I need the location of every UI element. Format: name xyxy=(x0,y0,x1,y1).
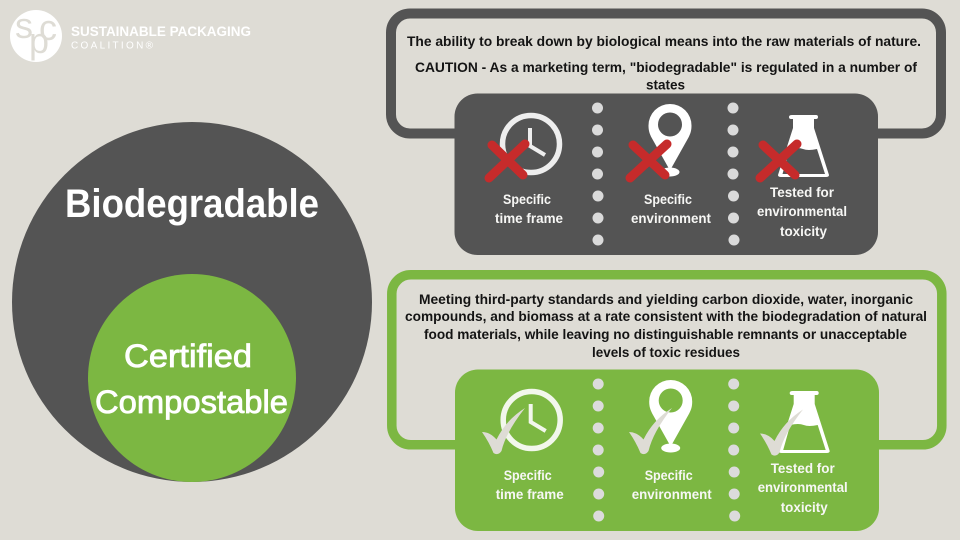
heading: biodegradable: Biodegradable xyxy=(65,182,319,226)
label: tested for environmental toxicity xyxy=(758,460,848,515)
label: specific environment: environment xyxy=(632,486,712,502)
label: tested for environmental toxicity: environmental xyxy=(758,479,848,495)
label: tested for environmental toxicity: environmental xyxy=(757,203,847,219)
label: specific environment: Specific xyxy=(644,191,692,207)
heading: certified compostable: Compostable xyxy=(95,384,288,420)
outline frame xyxy=(392,275,942,445)
icon: red cross on flask xyxy=(760,144,797,178)
definition text: compounds, and biomass at a rate consistent with the biodegradation of natural xyxy=(405,309,927,325)
logo mark xyxy=(10,5,62,62)
label: specific environment xyxy=(631,191,711,226)
definition text: CAUTION - As a marketing term, "biodegradable" is regulated in a number of xyxy=(415,60,917,76)
icon: location pin xyxy=(649,380,692,452)
icon: red cross on clock xyxy=(489,144,525,178)
definition text: levels of toxic residues xyxy=(592,345,740,361)
heading: certified compostable xyxy=(95,338,288,420)
logo sub name: COALITION® xyxy=(71,40,154,52)
icon: flask xyxy=(778,115,829,177)
label: specific environment xyxy=(632,467,712,502)
logo name: SUSTAINABLE PACKAGING xyxy=(71,24,251,39)
panel: biodegradable definition xyxy=(391,14,941,255)
label: tested for environmental toxicity xyxy=(757,184,847,239)
label: tested for environmental toxicity: Tested for xyxy=(770,184,835,200)
logo mark: c xyxy=(39,7,57,48)
label: specific environment: Specific xyxy=(645,467,693,483)
criteria panel xyxy=(455,370,879,531)
icon: check on clock xyxy=(482,408,525,454)
heading: certified compostable: Certified xyxy=(124,338,252,374)
panel: certified compostable definition xyxy=(392,275,942,531)
icon: flask xyxy=(779,391,830,453)
circle: biodegradable xyxy=(12,122,372,482)
label: specific time frame: Specific xyxy=(504,467,552,483)
dotted separators xyxy=(593,378,740,522)
definition text xyxy=(407,34,921,94)
logo: Sustainable Packaging Coalition xyxy=(10,5,251,62)
definition text: food materials, while leaving no distinguishable remnants or unacceptable xyxy=(424,327,907,343)
logo mark: s xyxy=(15,5,33,46)
icon: location pin xyxy=(648,104,692,176)
definition text: states xyxy=(646,78,685,94)
icon: red cross on pin xyxy=(630,144,667,178)
definition text: The ability to break down by biological means into the raw materials of nature. xyxy=(407,34,921,50)
label: specific environment: environment xyxy=(631,210,711,226)
label: specific time frame xyxy=(496,467,564,502)
logo mark: p xyxy=(29,20,49,61)
label: specific time frame: time frame xyxy=(495,210,563,226)
label: tested for environmental toxicity: Tested for xyxy=(771,460,835,476)
definition text xyxy=(405,292,927,361)
dotted separators xyxy=(592,102,740,246)
diagram: nested circles xyxy=(12,122,372,482)
label: specific time frame: Specific xyxy=(503,191,551,207)
label: specific time frame xyxy=(495,191,563,226)
icon: clock xyxy=(502,116,560,172)
icon: clock xyxy=(503,392,560,448)
label: specific time frame: time frame xyxy=(496,486,564,502)
definition text: Meeting third-party standards and yielding carbon dioxide, water, inorganic xyxy=(419,292,913,308)
icon: check on pin xyxy=(629,408,672,454)
label: tested for environmental toxicity: toxicity xyxy=(781,499,828,515)
outline frame xyxy=(391,14,941,134)
label: tested for environmental toxicity: toxicity xyxy=(780,223,827,239)
criteria panel xyxy=(454,94,878,255)
icon: check on flask xyxy=(760,410,803,456)
circle: certified compostable xyxy=(88,274,296,482)
